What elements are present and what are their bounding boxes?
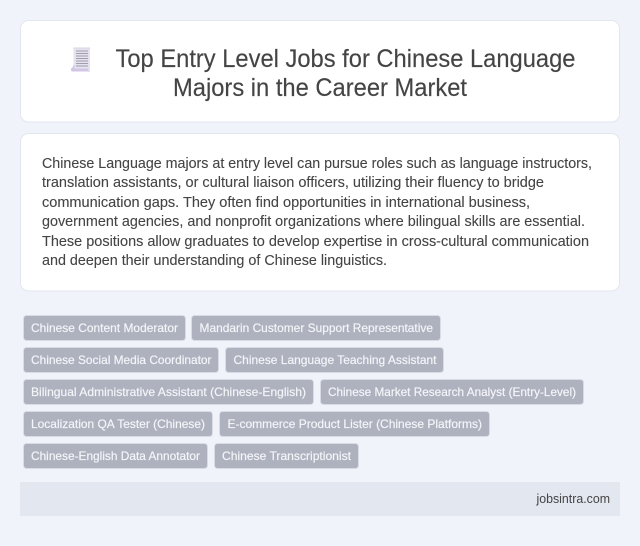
- description text: These positions allow graduates to develop expertise in cross-cultural communication: [42, 234, 589, 250]
- tag: Localization QA Tester (Chinese): Localization QA Tester (Chinese): [31, 417, 205, 431]
- job tags: [24, 316, 584, 468]
- panel: description: [20, 134, 620, 291]
- title: Majors in the Career Market: [173, 74, 467, 102]
- tag: Mandarin Customer Support Representative: [192, 316, 440, 340]
- description text: and deepen their understanding of Chinese linguistics.: [42, 253, 387, 269]
- description text: Chinese Language majors at entry level can pursue roles such as language instructors,: [42, 156, 592, 172]
- description text: communication gaps. They often find opportunities in international business,: [42, 195, 530, 211]
- tag: Localization QA Tester (Chinese): [24, 412, 212, 436]
- tag: Chinese Social Media Coordinator: Chinese Social Media Coordinator: [31, 353, 212, 367]
- footer bar: [20, 482, 620, 516]
- tag: Chinese Content Moderator: [24, 316, 186, 340]
- tag: Mandarin Customer Support Representative: Mandarin Customer Support Representative: [200, 321, 433, 335]
- tag: E-commerce Product Lister (Chinese Platforms): E-commerce Product Lister (Chinese Platforms): [228, 417, 482, 431]
- header card background: [20, 20, 620, 122]
- tag: Chinese Transcriptionist: [214, 444, 358, 468]
- panel: header: [20, 20, 620, 122]
- icon: document scroll: [71, 48, 90, 72]
- footer: [20, 482, 620, 516]
- description text: translation assistants, or cultural liaison officers, utilizing their fluency to bridge: [42, 175, 544, 191]
- tag: E-commerce Product Lister (Chinese Platforms): [220, 412, 490, 436]
- tag: Chinese Language Teaching Assistant: Chinese Language Teaching Assistant: [234, 353, 437, 367]
- tag: Chinese Market Research Analyst (Entry-Level): Chinese Market Research Analyst (Entry-Level): [328, 385, 576, 399]
- description card background: [20, 134, 620, 291]
- description text: government agencies, and nonprofit organizations where bilingual skills are essential.: [42, 214, 585, 230]
- title: Top Entry Level Jobs for Chinese Language: [116, 45, 576, 73]
- tag: Bilingual Administrative Assistant (Chinese-English): [24, 380, 314, 404]
- tag: Chinese Content Moderator: Chinese Content Moderator: [31, 321, 178, 335]
- tag: Bilingual Administrative Assistant (Chinese-English): Bilingual Administrative Assistant (Chinese-English): [31, 385, 306, 399]
- tag: Chinese Market Research Analyst (Entry-Level): [320, 380, 584, 404]
- title: [116, 45, 576, 102]
- tag: Chinese-English Data Annotator: Chinese-English Data Annotator: [31, 449, 200, 463]
- tag: Chinese-English Data Annotator: [24, 444, 208, 468]
- description text: [42, 156, 592, 269]
- tag: Chinese Language Teaching Assistant: [226, 348, 444, 372]
- tag: Chinese Transcriptionist: Chinese Transcriptionist: [222, 449, 352, 463]
- footer source text: jobsintra.com: [536, 492, 610, 506]
- tag: Chinese Social Media Coordinator: [24, 348, 218, 372]
